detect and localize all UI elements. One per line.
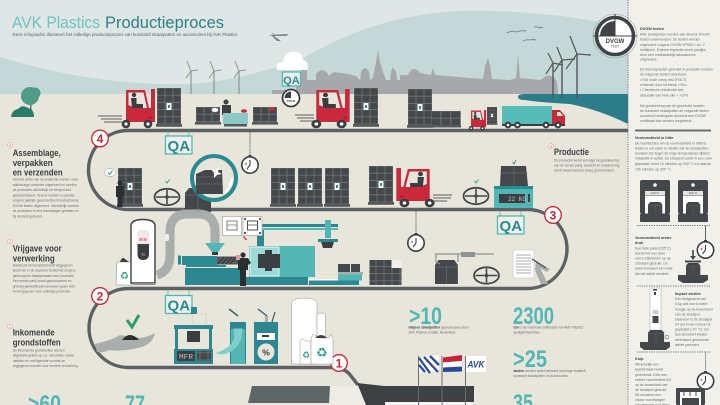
Vormvastheid onder druk text: [635, 236, 673, 276]
DVGW testen text: richtlijnen. Externe inspectie wordt jaarlijks: [640, 48, 706, 52]
section: Vrijgave: wordt het in de daarvoor bestemde drogers: [13, 269, 76, 273]
Vormvastheid in hitte text: geplaatst, eerst 15 minuten op 240 °C en daarna: [635, 162, 711, 166]
step 3 badge: 3: [550, 208, 557, 222]
row 4: hand with grains and check: [95, 315, 155, 352]
stopwatch and pressure pot: [678, 226, 714, 283]
divider bar: [635, 130, 711, 132]
section: Inkomende grondstoffen: De inkomende grondstoffen worden: [13, 348, 65, 352]
factory: white wall: [385, 402, 474, 405]
step 1 badge: [331, 355, 347, 371]
oven 1: [640, 180, 670, 222]
Vormvastheid onder druk text: straatpot gedrukt. De: [635, 262, 668, 266]
flag: AVK: [466, 356, 486, 372]
Impact sterkte text: geplaatst (-20 °C). De: [675, 328, 709, 332]
weighing scale: [494, 160, 533, 208]
Vormvastheid in hitte text: bestand zijn tegen de hoge temperaturen tijdens: [635, 152, 710, 156]
DVGW testen text: uitgevoerd volgens DVGW VP550-1 en -2: [640, 43, 705, 47]
DVGW testen text: minimale duur tot breuk > 50u.: [640, 83, 687, 87]
section: Vrijgave: [8, 239, 76, 294]
Impact sterkte text: van de straatpot.: [675, 312, 701, 316]
ground background: [0, 94, 628, 405]
section: Inkomende grondstoffen: Inkomende: [13, 328, 55, 338]
section: Assemblage: verpakken: [13, 158, 53, 168]
section: Assemblage: willekeurige controles uitgevoerd en worden: [13, 183, 77, 187]
step 2 badge: 2: [97, 289, 104, 303]
section: Productie: De productie wordt vervolgd na goedkeuring: [554, 158, 619, 162]
Impact sterkte text: Een testgewicht van: [675, 297, 706, 301]
QA sign row 4: QA: [168, 298, 190, 314]
Vormvastheid onder druk text: druk: [635, 241, 644, 245]
stat: >10: AVK Plastics in Balk, Nederland.: [408, 330, 456, 334]
section: Assemblage: geassembleerd. Tevens worden in parallel,: [13, 193, 75, 197]
Knip text: Dit simuleert een: [635, 393, 661, 397]
factory: light wall: [330, 386, 365, 405]
section: Assemblage: [8, 143, 79, 218]
wind turbines right: [546, 36, 591, 98]
raw material silos and bags: [292, 298, 333, 364]
Vormvastheid onder druk text: plaat simuleert een wals: [635, 266, 673, 270]
Vormvastheid in hitte text: testen is om zeker te stellen dat de straatpotten: [635, 146, 709, 150]
airplane: [269, 33, 288, 41]
Knip text: Knip: [635, 357, 644, 361]
dryer silo: [131, 220, 155, 285]
section: Assemblage: Assemblage,: [13, 148, 61, 158]
step 1 badge: 1: [336, 356, 343, 370]
section: Vrijgave: wordt gegeven voor volledige productie.: [13, 290, 71, 294]
step 4 badge: [92, 130, 108, 147]
hills: [0, 11, 628, 94]
section: Inkomende grondstoffen: metalen en vochtgehalte voordat ze: [13, 359, 65, 363]
vertical dotted divider: [627, 0, 629, 405]
section: Vrijgave: Een eerste partij wordt geproduceerd en: [13, 279, 72, 283]
stat: >25: >25: [513, 346, 547, 373]
row 1: inspection station: [195, 100, 278, 126]
DVGW test badge: TEST: [611, 44, 619, 48]
horizontal dotted divider: [637, 351, 710, 353]
Vormvastheid in hitte text: De hoofdtesten om de vormvastheid in hitte te: [635, 142, 706, 146]
Vormvastheid onder druk text: die het asfalt verdicht.: [635, 272, 669, 276]
Vormvastheid in hitte text: Vormvastheid in hitte: [635, 136, 673, 140]
Impact sterkte text: [675, 292, 713, 347]
section: Assemblage: 4: [9, 143, 11, 147]
section: Productie: 3: [550, 144, 552, 148]
QA sign row 2 left: QA: [168, 138, 190, 155]
subtitle: Deze infographic illustreert het volledige productieproces van kunststof straatpotten en accessoires bij AVK Plastics: [12, 32, 238, 37]
Knip text: zwaar vrachtwagen: [635, 398, 665, 402]
birds: [507, 27, 543, 41]
DVGW testen text: Na goedkeuring van de grondstof moeten: [640, 104, 704, 108]
Impact sterkte text: weerstand gedurende: [675, 338, 709, 342]
clipboard with hand: [513, 250, 550, 284]
gauge wheel row 3: [474, 267, 499, 284]
moisture analyser: [254, 309, 278, 364]
section: Assemblage: volgens jaarlijks geaccrediteerd toetsschema,: [13, 198, 79, 202]
weighing scale: 22 KG: [508, 196, 526, 203]
section: Assemblage: DVGW testen uitgevoerd. Uiteindelijk worden: [13, 204, 79, 208]
stat: >10: [408, 303, 470, 334]
row 1: shipping stacks: [407, 89, 461, 128]
Vormvastheid in hitte text: [635, 136, 712, 172]
Impact sterkte text: hoogte op de bovenkant: [675, 308, 713, 312]
Impact sterkte text: Impact sterkte: [675, 292, 701, 296]
DVGW cloud: [272, 52, 308, 94]
impact drop tower: [640, 288, 670, 350]
section: Vrijgave: verwerking: [13, 254, 55, 264]
section: Assemblage: en verzenden: [13, 168, 63, 178]
output conveyor: [308, 264, 363, 285]
stat: 2300: [513, 303, 584, 334]
moisture analyser: %: [262, 348, 270, 358]
sea: [518, 94, 628, 124]
row 3: recycling bag: [116, 258, 132, 285]
section: Inkomende grondstoffen: grondstoffen: [13, 338, 61, 348]
injection moulding machine: [178, 220, 338, 285]
gauge wheel with check: [154, 180, 180, 205]
title: AVK Plastics: [12, 13, 100, 32]
DVGW testen text: door een onafhankelijk laboratorium: [640, 53, 696, 57]
Impact sterkte text: test simuleert impact: [675, 332, 707, 336]
raw material silos and bags: ♻: [302, 351, 310, 361]
wind turbines left: [186, 61, 246, 94]
DVGW testen text: AVK straatpotten worden aan diverse DVGW: [640, 32, 710, 36]
gauge wheel row 2 right: [464, 180, 488, 204]
Vormvastheid onder druk text: Vormvastheid onder: [635, 236, 672, 240]
section: Productie: [549, 144, 620, 172]
horizontal dotted divider: [637, 285, 710, 287]
section: Inkomende grondstoffen: uitgebreid getest op o.a. viscositeit, zware: [13, 354, 74, 358]
section: Vrijgave: Vrijgave voor: [13, 244, 62, 254]
machine operator: [236, 252, 251, 286]
Impact sterkte text: 6 kg valt van 6 meter: [675, 302, 708, 306]
row 2: worker with stack and check: [104, 168, 143, 207]
Vormvastheid in hitte text: installatie in asfalt. De straatpot wordt in een oven: [635, 156, 712, 160]
horizontal dotted divider: [637, 224, 710, 226]
flagpoles: [418, 356, 466, 405]
stopwatch below belt: [408, 211, 424, 251]
section: Productie: Productie: [554, 147, 589, 157]
small forklift: [469, 107, 498, 130]
DVGW test badge: [593, 14, 637, 58]
Vormvastheid onder druk text: van 0.156N/mm² op de: [635, 256, 671, 260]
QA sign top: QA: [283, 75, 300, 87]
Knip text: typeformaat wordt: [635, 368, 663, 372]
section: Vrijgave: Nadat QA het kunststof heeft vrijgegeven: [13, 264, 73, 268]
city skyline: [296, 50, 558, 94]
section: Assemblage: de producten uiteindelijk tot eindproduct: [13, 188, 71, 192]
QA sign below belt: QA: [500, 218, 522, 235]
flag: AVK: AVK: [467, 360, 485, 370]
oven 1: 240 °C: [651, 191, 659, 195]
step 3 badge: [545, 207, 561, 223]
stat: >25: landen worden actief beleverd met hoge kwaliteit: [514, 369, 586, 373]
stat: 2300: spuitgietmachines.: [514, 330, 541, 334]
mould plates: [222, 216, 262, 240]
section: Productie: van de eerste partij. Gewicht en maatvoering: [554, 164, 620, 168]
right info panel background: [628, 0, 720, 405]
row 2: stacks: [270, 168, 350, 207]
section: Assemblage: bij de klant geleverd.: [13, 214, 43, 218]
DVGW testen text: De thermoplasten gebruikt in productie moeten: [640, 68, 713, 72]
section: Assemblage: de producten in een vrachtwagen geladen en: [13, 209, 79, 213]
section: Inkomende grondstoffen: vrijgegeven worden voor verdere verwerking.: [13, 364, 79, 368]
DVGW testen text: de kunststof straatpotten de volgende testen: [640, 109, 709, 113]
section: Inkomende grondstoffen: [8, 324, 79, 368]
MFR tester: [174, 314, 213, 364]
Knip text: Afhankelijk van: [635, 362, 659, 366]
section: Inkomende grondstoffen: 1: [9, 325, 11, 329]
DVGW testen text: absorptie van hete olie < +10%: [640, 94, 688, 98]
stat: >10: miljoen straatpotten geproduceerd door: [408, 326, 470, 330]
row 3: inspection stack: [370, 260, 402, 285]
section: Vrijgave: grondig gekwalificeerd alvorens groen licht: [13, 284, 75, 288]
QA sign row 4: [166, 290, 197, 314]
Impact sterkte text: Daarvoor is de straatpot: [675, 318, 712, 322]
DVGW testen text: [640, 27, 713, 123]
small DVGW badge: DVGW: [287, 99, 296, 103]
stopwatch and knip press: [676, 353, 714, 405]
step 4 badge: 4: [97, 132, 104, 146]
section: Assemblage: Aan het einde van de productie worden meer: [13, 178, 79, 182]
section: Productie: wordt bewerraad per ploeg gecontroleerd.: [554, 168, 615, 172]
DVGW testen text: uitgevoerd.: [640, 58, 657, 62]
dryer silo: ≋≋: [139, 237, 147, 243]
section: Vrijgave: gedroogd en klaargemaakt voor productie.: [13, 274, 75, 278]
magnifier on pot: [185, 156, 236, 212]
flag: Friesland: [419, 355, 439, 373]
Vormvastheid onder druk text: Een hete plaat (235°C): [635, 246, 671, 250]
DVGW testen text: succesvol ondergaan alvorens een DVGW: [640, 114, 707, 118]
Vormvastheid onder druk text: wordt met een druk: [635, 252, 665, 256]
Knip text: de straatpot gedrukt.: [635, 388, 667, 392]
stat: >25: [513, 346, 586, 378]
DVGW testen text: DVGW testen: [640, 27, 665, 31]
Impact sterkte text: winter perioden.: [675, 343, 700, 347]
flag: Netherlands: [443, 355, 462, 372]
Knip text: op de bovenkant van: [635, 383, 668, 387]
trees: [11, 87, 40, 117]
stopwatch row 2 top: [242, 132, 258, 173]
oven 2: [678, 180, 708, 222]
DVGW testen text: de volgende testen doorstaan:: [640, 72, 687, 76]
stat: 2300: 2300: [513, 303, 554, 330]
DVGW testen text: • Chemische resistentie test,: [640, 88, 684, 92]
row 2: stack and reversed forklift: [368, 166, 452, 207]
step 2 badge: [92, 288, 108, 304]
Knip text: [635, 357, 671, 405]
DVGW test badge: DVGW: [606, 39, 625, 45]
row 1: forklift with stack: [98, 88, 182, 128]
teal feed column: [217, 309, 246, 364]
truck: [502, 106, 565, 128]
Knip text: zekere hoeveelheid kN: [635, 378, 671, 382]
dryer silo: °C: [141, 253, 145, 257]
QA sign below belt: [498, 211, 524, 235]
Impact sterkte text: 24 uur in een vriezer is: [675, 322, 711, 326]
conveyor belt: [88, 130, 628, 385]
stat: >25: kunststof straatpotten en accessoires.: [514, 374, 569, 378]
section: Vrijgave: 2: [9, 240, 11, 244]
stat: 2300: ton is de maximale sluitkracht van AVK Plastics': [514, 326, 584, 330]
title: Productieproces: [105, 13, 224, 32]
DVGW testen text: certificaat kan worden toegekend.: [640, 119, 692, 123]
material pipe: [157, 209, 215, 275]
title: [12, 13, 224, 32]
sky background: [0, 0, 628, 95]
QA sign row 2 left: [166, 131, 192, 155]
small DVGW badge: [282, 90, 300, 106]
factory: dark grey roof: [248, 386, 330, 403]
row 3: recycling bag: ♻: [120, 271, 129, 282]
factory: dark hull: [357, 383, 474, 405]
MFR tester: MFR: [179, 354, 194, 362]
DVGW testen text: • Full notch creep test (FNCT),: [640, 78, 687, 82]
caliper and pot: [435, 252, 494, 284]
stat: >10: >10: [409, 303, 442, 330]
Vormvastheid in hitte text: 105 minuten op 200 °C.: [635, 168, 672, 172]
raw material silos and bags: ♻: [316, 346, 328, 361]
row 1: second forklift and stack: [295, 88, 379, 128]
DVGW testen text: testen onderworpen. De testen worden: [640, 38, 700, 42]
Knip text: gedurende 100u een: [635, 373, 667, 377]
oven 2: 200 °C: [689, 191, 697, 195]
